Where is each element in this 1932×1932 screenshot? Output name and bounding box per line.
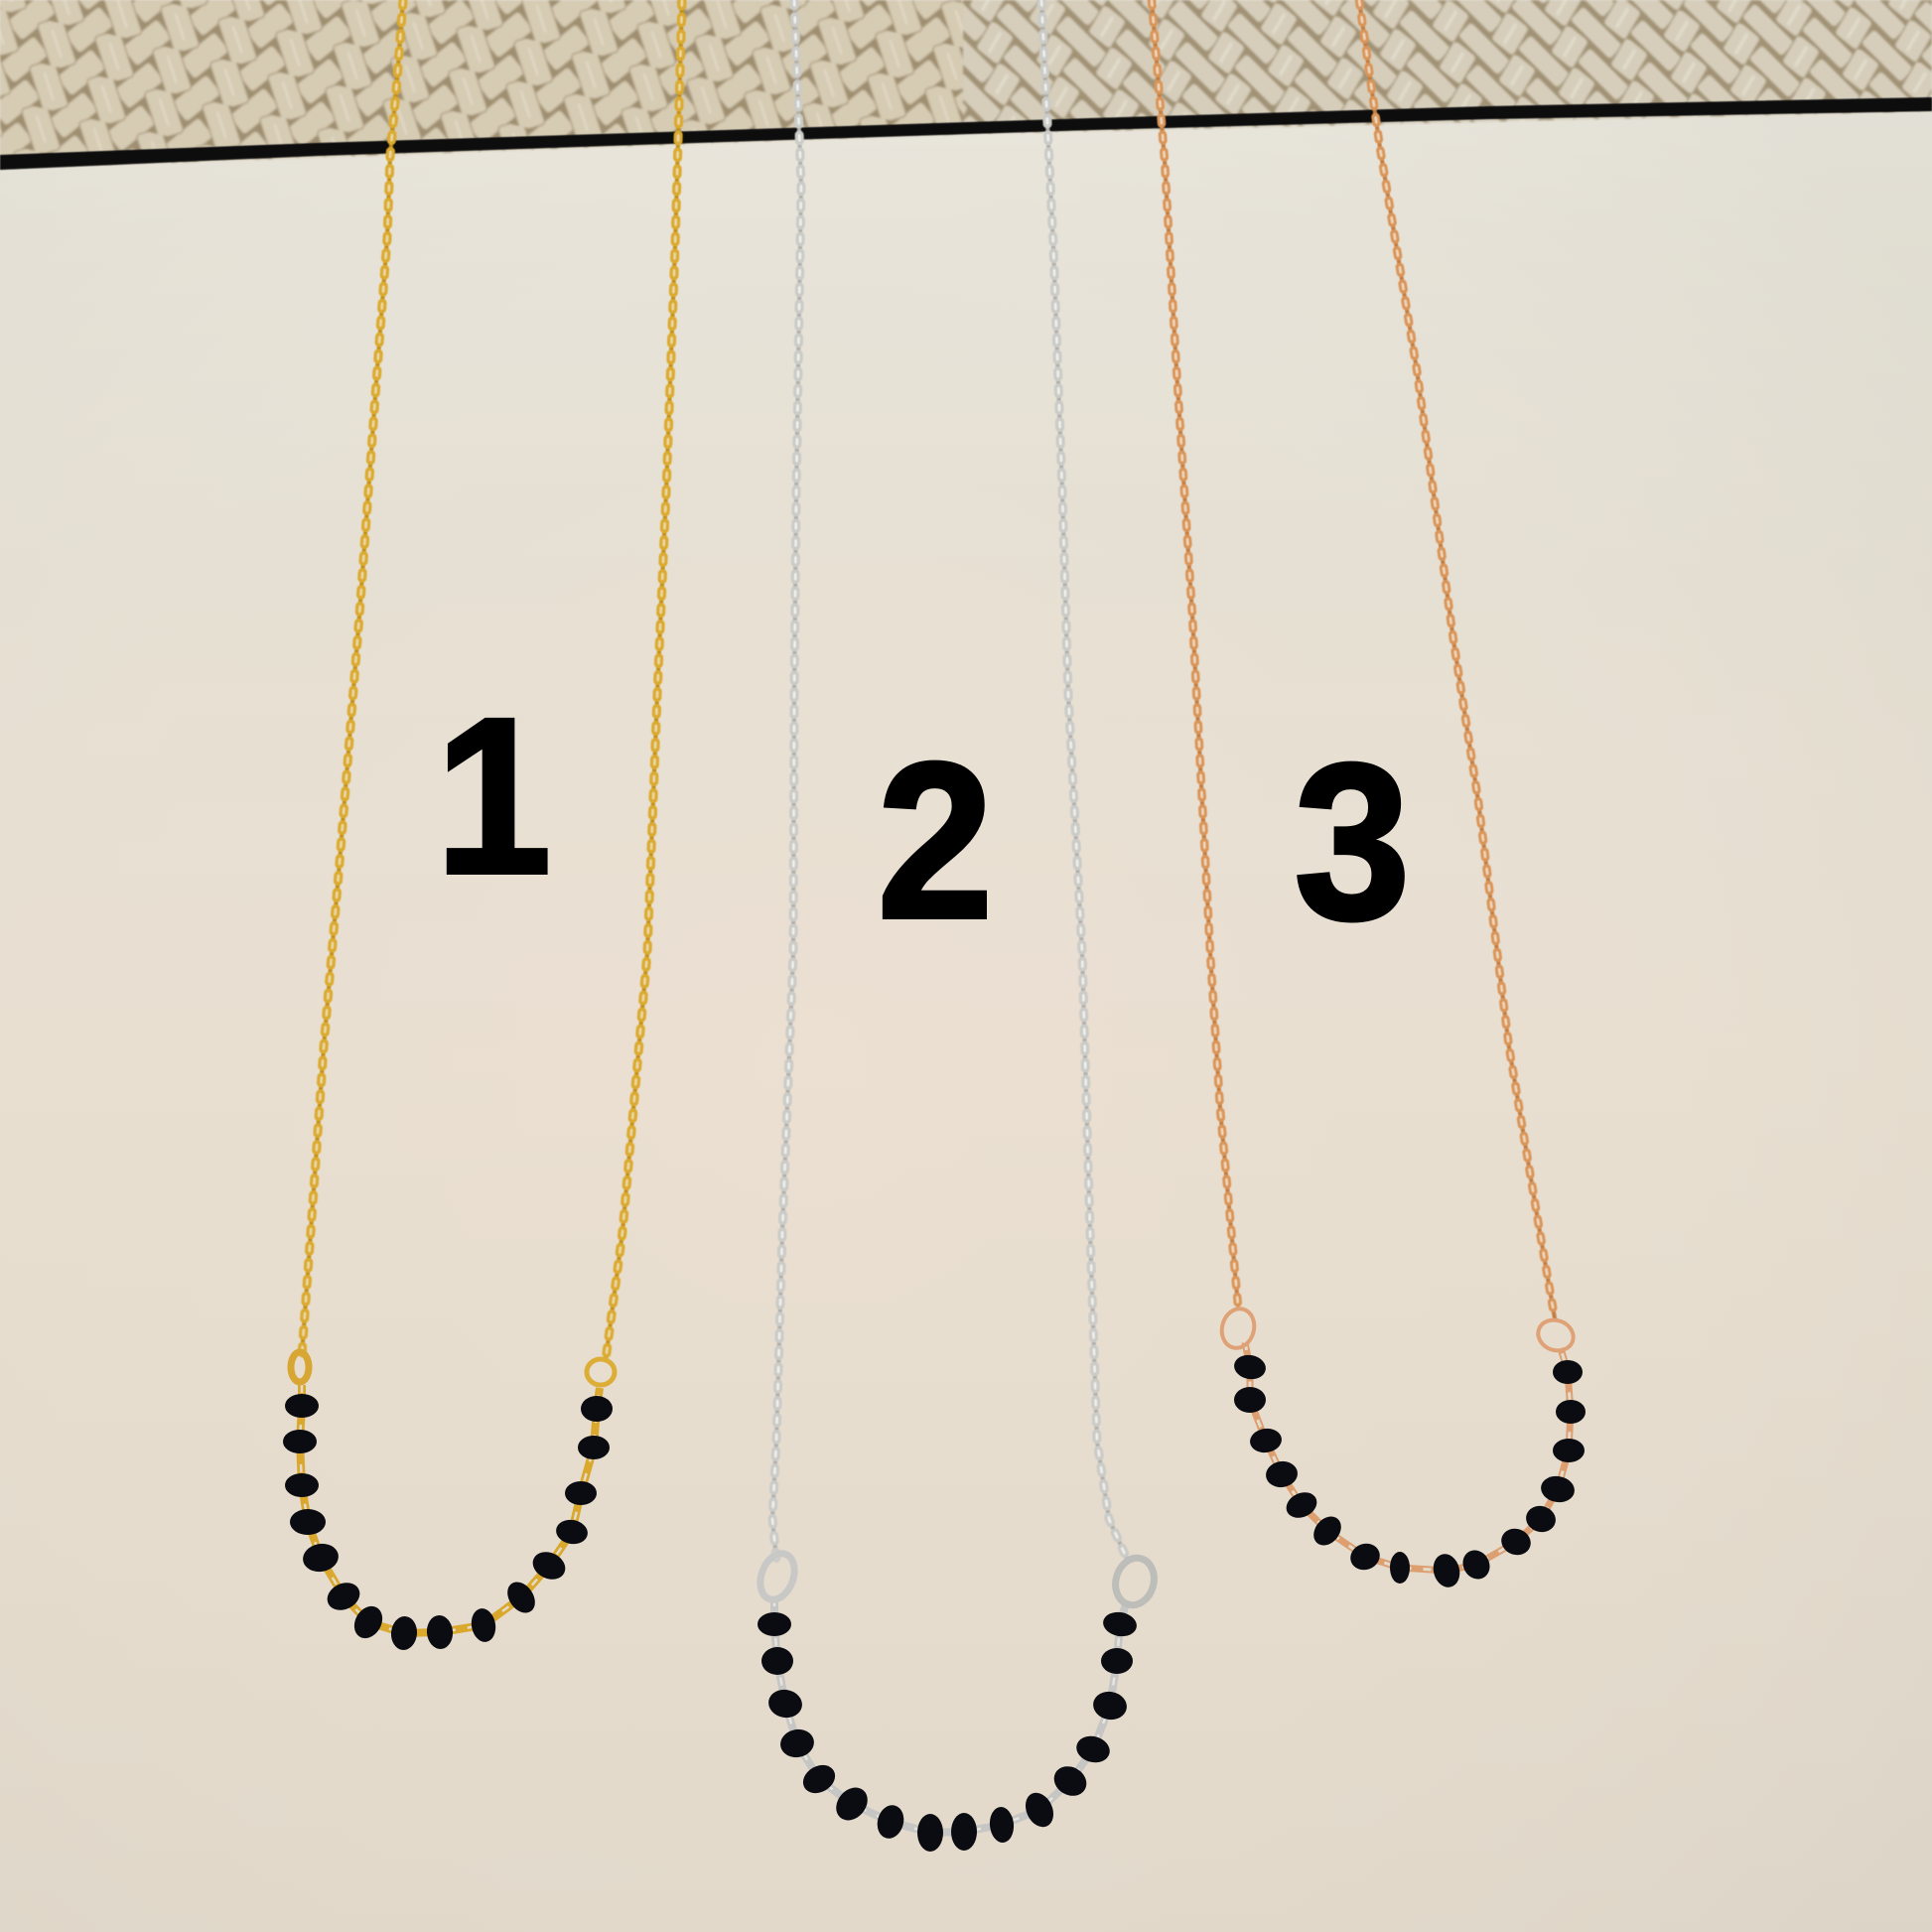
gold bead wire	[300, 1385, 600, 1633]
woven textured band at top	[0, 0, 1932, 169]
number 3: 3	[1294, 718, 1411, 966]
gold jump rings	[291, 1352, 615, 1385]
rose gold chain strands	[1152, 0, 1555, 1318]
silver chain strands	[772, 0, 1127, 1559]
necklace 3: rose gold	[1152, 0, 1586, 1590]
necklace 2: silver	[755, 0, 1160, 1852]
rose gold jump rings	[1217, 1306, 1578, 1355]
silver bead wire	[774, 1598, 1127, 1833]
black beads	[1232, 1352, 1586, 1590]
black beads	[283, 1394, 613, 1651]
silver jump rings	[755, 1549, 1160, 1609]
number 2: 2	[877, 717, 994, 965]
necklace 1: gold	[283, 0, 682, 1651]
number 1: 1	[435, 672, 552, 920]
rose gold bead wire	[1245, 1342, 1571, 1571]
gold chain strands	[302, 0, 682, 1360]
black edge line under woven band	[0, 97, 1932, 170]
black beads	[758, 1609, 1139, 1852]
